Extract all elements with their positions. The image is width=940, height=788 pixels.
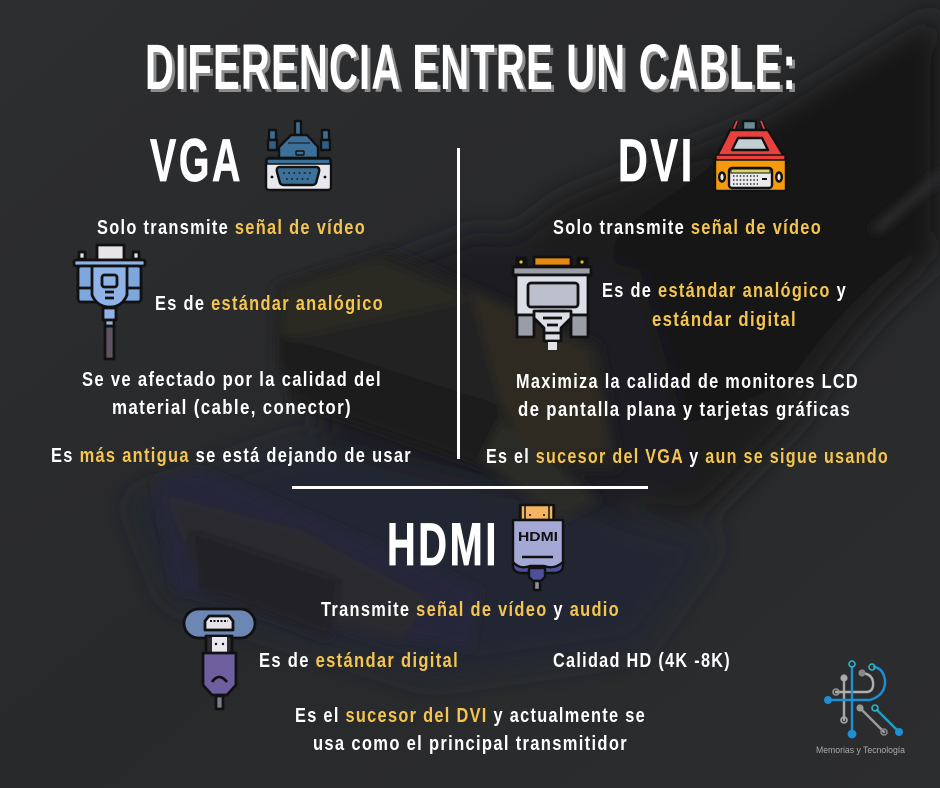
text: solo transmite: Solo transmite señal de vídeo [553, 217, 822, 239]
text: estandar analogico y digital: estándar digital [652, 309, 797, 331]
text: se ve afectado: material (cable, conector) [112, 397, 352, 419]
panel: DVI [486, 121, 889, 468]
text: calidad HD: Calidad HD (4K -8K) [553, 650, 731, 672]
heading: HDMI: HDMI [387, 511, 499, 578]
panel: HDMI [184, 505, 731, 755]
text: estandar digital: Es de estándar digital [259, 650, 459, 672]
text: transmite: Transmite señal de vídeo y audio [321, 599, 620, 621]
text: estandar analogico: Es de estándar analógico [155, 293, 384, 315]
text: maximiza: Maximiza la calidad de monitores LCD [516, 371, 859, 393]
logo: Memorias y Tecnologia [816, 661, 906, 756]
text: mas antigua: Es más antigua se está dejando de usar [51, 445, 412, 467]
icon: VGA connector front [266, 121, 331, 190]
horizontal divider [292, 486, 648, 489]
text: sucesor DVI: Es el sucesor del DVI y actualmente se [295, 705, 646, 727]
heading: DVI: DVI [618, 127, 695, 194]
heading: VGA: VGA [150, 127, 243, 194]
icon: HDMI plug side [184, 609, 255, 709]
icon: HDMI plug front [513, 505, 563, 590]
icon: VGA connector side [74, 245, 145, 359]
text: sucesor DVI [295, 705, 646, 755]
icon: DVI connector side [513, 257, 591, 350]
panel: VGA [51, 121, 412, 467]
logo: Memorias y Tecnologia: Memorias y Tecnología [816, 745, 906, 756]
text: estandar analogico y digital [602, 280, 847, 331]
text: se ve afectado [82, 369, 382, 419]
text: maximiza [516, 371, 859, 421]
text: se ve afectado: Se ve afectado por la calidad del [82, 369, 382, 391]
vertical divider [457, 148, 460, 459]
icon: DVI connector front [715, 121, 786, 191]
text: sucesor VGA: Es el sucesor del VGA y aun se sigue usando [486, 446, 889, 468]
text: sucesor DVI: usa como el principal transmitidor [313, 733, 628, 755]
text: maximiza: de pantalla plana y tarjetas gráficas [518, 399, 851, 421]
icon: HDMI plug front: HDMI [518, 529, 558, 544]
text: estandar analogico y digital: Es de estándar analógico y [602, 280, 847, 302]
text: solo transmite: Solo transmite señal de vídeo [97, 217, 366, 239]
